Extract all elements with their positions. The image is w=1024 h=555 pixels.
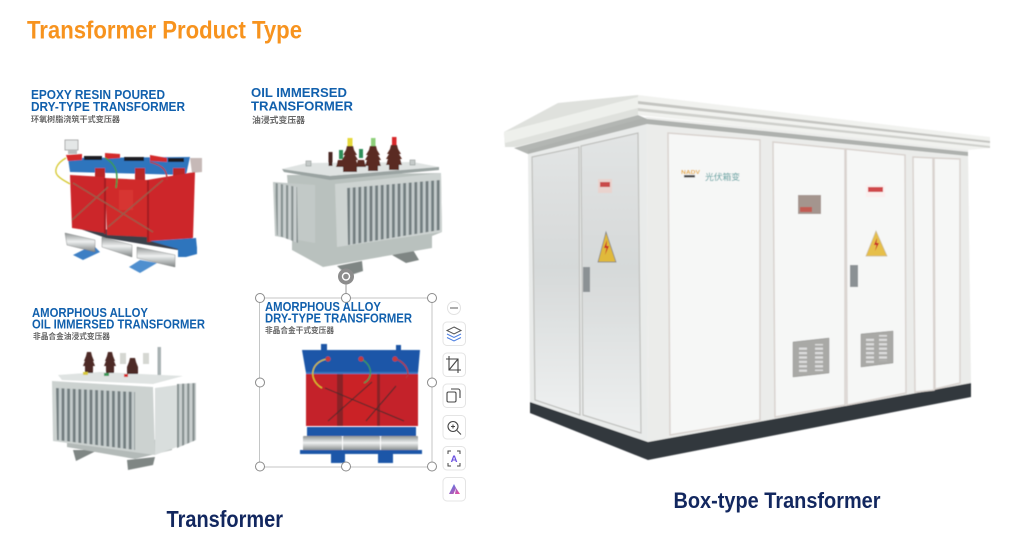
panel: amorphous alloy dry-type transformer — [256, 268, 436, 471]
icon: magnifier — [443, 416, 466, 439]
heading: oil immersed — [251, 85, 353, 125]
icon: rotate handle — [338, 268, 354, 284]
label: transformer: Transformer — [166, 506, 283, 532]
brand text: 光伏箱变 — [705, 171, 740, 182]
heading: amorphous dry — [265, 299, 412, 335]
roof — [504, 95, 990, 156]
image: box-type transformer — [504, 95, 990, 460]
left doors — [532, 133, 641, 433]
heading: amorphous oil — [32, 305, 205, 341]
heading: epoxy resin: EPOXY RESIN POURED — [31, 87, 165, 102]
heading: amorphous oil: 非晶合金油浸式变压器 — [33, 331, 110, 341]
panel: amorphous alloy oil immersed transformer — [32, 305, 205, 470]
icon: text scan — [443, 446, 466, 470]
icon: minus — [448, 302, 460, 314]
heading: amorphous dry: DRY-TYPE TRANSFORMER — [265, 310, 412, 326]
heading: oil immersed: 油浸式变压器 — [252, 114, 305, 125]
icon: copy — [443, 384, 466, 408]
heading: amorphous dry: 非晶合金干式变压器 — [265, 325, 334, 335]
image: red epoxy transformer — [56, 140, 202, 273]
warning sign left — [598, 232, 616, 262]
icon: app logo — [443, 478, 466, 501]
enclosure left face — [528, 117, 648, 442]
vents — [793, 331, 893, 377]
heading: amorphous dry: AMORPHOUS ALLOY — [265, 299, 381, 314]
right panels — [668, 133, 960, 435]
icon: text scan: A — [451, 454, 458, 465]
label: box-type transformer: Box-type Transformer — [674, 488, 881, 513]
stickers — [598, 179, 885, 214]
heading: epoxy resin: 环氧树脂浇筑干式变压器 — [31, 114, 120, 124]
brand text: NADV — [681, 170, 700, 176]
icon: crop — [443, 353, 466, 376]
selection frame with handles — [256, 283, 436, 471]
heading: amorphous oil: OIL IMMERSED TRANSFORMER — [32, 316, 205, 332]
heading: amorphous oil: AMORPHOUS ALLOY — [32, 305, 148, 320]
heading: oil immersed: TRANSFORMER — [251, 98, 353, 114]
brand text — [681, 170, 740, 182]
base plinth — [530, 383, 971, 460]
door handles — [583, 265, 858, 292]
image: grey oil transformer — [273, 137, 442, 276]
image: grey amorphous oil transformer — [52, 347, 196, 470]
panel: oil immersed transformer — [251, 85, 442, 276]
enclosure right face — [647, 117, 971, 442]
warning sign right — [866, 231, 887, 256]
heading: epoxy resin — [31, 87, 185, 124]
heading: oil immersed: OIL IMMERSED — [251, 85, 347, 100]
toolbar icons — [443, 302, 466, 501]
title: Transformer Product Type — [27, 16, 302, 44]
icon: layers — [443, 322, 466, 346]
panel: epoxy resin poured dry-type transformer — [31, 87, 202, 273]
image: red amorphous dry transformer — [300, 344, 422, 463]
heading: epoxy resin: DRY-TYPE TRANSFORMER — [31, 99, 185, 114]
